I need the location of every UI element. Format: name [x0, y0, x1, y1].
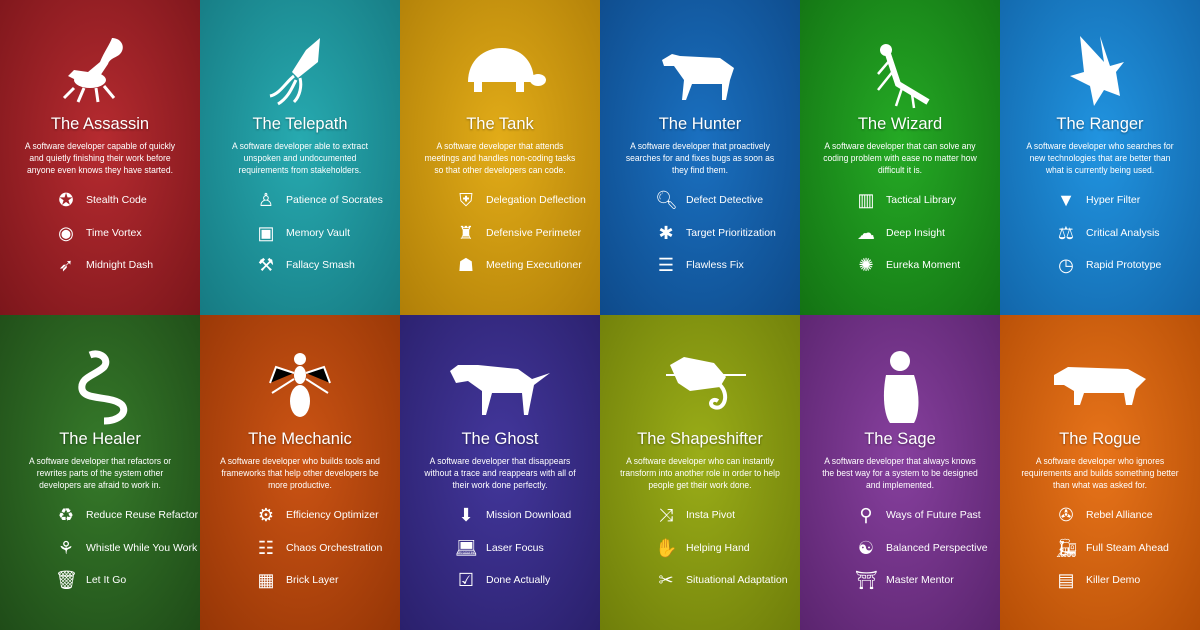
- abilities: Efficiency Optimizer: [286, 509, 379, 521]
- abilities: Target Prioritization: [686, 227, 776, 239]
- abilities: Full Steam Ahead: [1086, 542, 1169, 554]
- title: The Hunter: [659, 115, 741, 133]
- abilities: ▤: [1057, 570, 1074, 590]
- icon: ant: [269, 353, 331, 417]
- abilities: ☗: [458, 255, 474, 275]
- abilities: Ways of Future Past: [886, 509, 981, 521]
- title: The Healer: [59, 430, 141, 448]
- title: The Rogue: [1059, 430, 1141, 448]
- abilities: [857, 190, 960, 275]
- icon: mantis: [877, 44, 930, 108]
- abilities: ♜: [458, 223, 474, 243]
- abilities: Meeting Executioner: [486, 259, 582, 271]
- icon: tortoise: [468, 48, 546, 92]
- abilities: ⛩: [855, 570, 878, 590]
- description: A software developer able to extract unspoken and undocumented requirements from stakeholders.: [232, 141, 368, 176]
- panel: The Healer: [0, 315, 200, 630]
- title: The Ranger: [1056, 115, 1144, 133]
- panel: The Ghost: [400, 315, 600, 630]
- abilities: ◉: [58, 223, 74, 243]
- icon: eagle: [1070, 36, 1124, 106]
- abilities: Mission Download: [486, 509, 571, 521]
- abilities: Defect Detective: [686, 194, 763, 206]
- abilities: [257, 190, 383, 275]
- abilities: ✺: [858, 255, 874, 275]
- abilities: Insta Pivot: [686, 509, 735, 521]
- abilities: Helping Hand: [686, 542, 750, 554]
- panel: The Wizard: [800, 0, 1000, 315]
- abilities: ☰: [658, 255, 674, 275]
- abilities: Eureka Moment: [886, 259, 960, 271]
- abilities: Deep Insight: [886, 227, 945, 239]
- abilities: ▦: [257, 570, 274, 590]
- abilities: [1055, 505, 1169, 590]
- icon: wolf: [662, 54, 734, 100]
- abilities: ◷: [1058, 255, 1074, 275]
- abilities: Rapid Prototype: [1086, 259, 1161, 271]
- abilities: Hyper Filter: [1086, 194, 1140, 206]
- abilities: ☯: [858, 538, 874, 558]
- panel: The Ranger: [1000, 0, 1200, 315]
- description: A software developer that always knows the best way for a system to be designed and implemented.: [822, 456, 978, 491]
- title: The Tank: [466, 115, 534, 133]
- title: The Mechanic: [248, 430, 352, 448]
- abilities: [455, 505, 571, 590]
- abilities: Midnight Dash: [86, 259, 153, 271]
- title: The Ghost: [461, 430, 539, 448]
- abilities: Stealth Code: [86, 194, 147, 206]
- abilities: Situational Adaptation: [686, 574, 788, 586]
- abilities: ⚖: [1058, 223, 1074, 243]
- abilities: Balanced Perspective: [886, 542, 988, 554]
- title: The Shapeshifter: [637, 430, 763, 448]
- abilities: Time Vortex: [86, 227, 142, 239]
- abilities: Let It Go: [86, 574, 126, 586]
- icon: panther: [450, 365, 550, 415]
- abilities: ⬇: [458, 505, 474, 525]
- abilities: [1057, 190, 1161, 275]
- title: The Sage: [864, 430, 936, 448]
- icon: monkey: [884, 351, 918, 423]
- abilities: [855, 505, 988, 590]
- abilities: [55, 505, 198, 590]
- abilities: Killer Demo: [1086, 574, 1140, 586]
- abilities: ✋: [655, 538, 677, 558]
- abilities: ♻: [58, 505, 74, 525]
- abilities: ▣: [257, 223, 274, 243]
- panel: The Mechanic: [200, 315, 400, 630]
- description: A software developer capable of quickly and quietly finishing their work before anyone even knows they have started.: [25, 141, 175, 176]
- abilities: Patience of Socrates: [286, 194, 383, 206]
- description: A software developer who ignores requirements and builds something better than what was asked for.: [1021, 456, 1179, 491]
- icon: scorpion: [63, 38, 123, 103]
- abilities: 💻︎: [455, 538, 478, 558]
- description: A software developer who searches for new technologies that are better than what is currently being used.: [1026, 141, 1174, 176]
- abilities: Chaos Orchestration: [286, 542, 382, 554]
- abilities: ⛨: [459, 190, 473, 210]
- abilities: [655, 505, 788, 590]
- description: A software developer that can solve any coding problem with ease no matter how difficult it is.: [823, 141, 977, 176]
- description: A software developer that proactively searches for and fixes bugs as soon as they find them.: [626, 141, 774, 176]
- abilities: Brick Layer: [286, 574, 339, 586]
- abilities: 🔍︎: [655, 190, 678, 210]
- abilities: ⚘: [58, 538, 74, 558]
- abilities: [458, 190, 586, 275]
- panel: The Assassin: [0, 0, 200, 315]
- abilities: ☷: [258, 538, 274, 558]
- abilities: ✪: [58, 190, 74, 210]
- panel: The Tank: [400, 0, 600, 315]
- abilities: Delegation Deflection: [486, 194, 586, 206]
- abilities: Critical Analysis: [1086, 227, 1160, 239]
- abilities: Flawless Fix: [686, 259, 744, 271]
- abilities: Rebel Alliance: [1086, 509, 1153, 521]
- description: A software developer that refactors or rewrites parts of the system other developers are afraid to work in.: [29, 456, 171, 491]
- icon: chameleon: [666, 357, 746, 410]
- title: The Telepath: [252, 115, 348, 133]
- abilities: ⤨: [659, 505, 673, 525]
- abilities: Memory Vault: [286, 227, 350, 239]
- abilities: ➶: [58, 255, 74, 275]
- abilities: 🗑︎: [55, 570, 78, 590]
- abilities: [257, 505, 382, 590]
- abilities: Tactical Library: [886, 194, 956, 206]
- abilities: ✱: [658, 223, 674, 243]
- abilities: ☁: [857, 223, 875, 243]
- icon: honey badger: [1054, 367, 1146, 405]
- abilities: [655, 190, 776, 275]
- abilities: ▼: [1057, 190, 1075, 210]
- panel: The Telepath: [200, 0, 400, 315]
- abilities: ✇: [1058, 505, 1074, 525]
- description: A software developer who builds tools and frameworks that help other developers be more productive.: [220, 456, 380, 491]
- abilities: [58, 190, 153, 275]
- title: The Wizard: [858, 115, 942, 133]
- panel: The Sage: [800, 315, 1000, 630]
- abilities: ▥: [857, 190, 874, 210]
- abilities: Master Mentor: [886, 574, 954, 586]
- abilities: ⚒: [258, 255, 274, 275]
- abilities: Reduce Reuse Refactor: [86, 509, 198, 521]
- description: A software developer that attends meetings and handles non-coding tasks so that other developers can code.: [425, 141, 575, 176]
- abilities: ⚙: [258, 505, 274, 525]
- abilities: ⚲: [859, 505, 873, 525]
- panel: The Hunter: [600, 0, 800, 315]
- abilities: Done Actually: [486, 574, 550, 586]
- icon: squid: [270, 38, 320, 106]
- abilities: Whistle While You Work: [86, 542, 197, 554]
- abilities: Fallacy Smash: [286, 259, 355, 271]
- abilities: Laser Focus: [486, 542, 544, 554]
- abilities: Defensive Perimeter: [486, 227, 581, 239]
- abilities: ☑: [458, 570, 474, 590]
- description: A software developer who can instantly transform into another role in order to help people get their work done.: [620, 456, 780, 491]
- description: A software developer that disappears without a trace and reappears with all of their work done perfectly.: [424, 456, 576, 491]
- abilities: 🚂︎: [1055, 538, 1078, 558]
- title: The Assassin: [51, 115, 149, 133]
- panel: The Rogue: [1000, 315, 1200, 630]
- abilities: ♙: [258, 190, 274, 210]
- abilities: ✂: [658, 570, 674, 590]
- panel: The Shapeshifter: [600, 315, 800, 630]
- icon: snake: [78, 350, 128, 424]
